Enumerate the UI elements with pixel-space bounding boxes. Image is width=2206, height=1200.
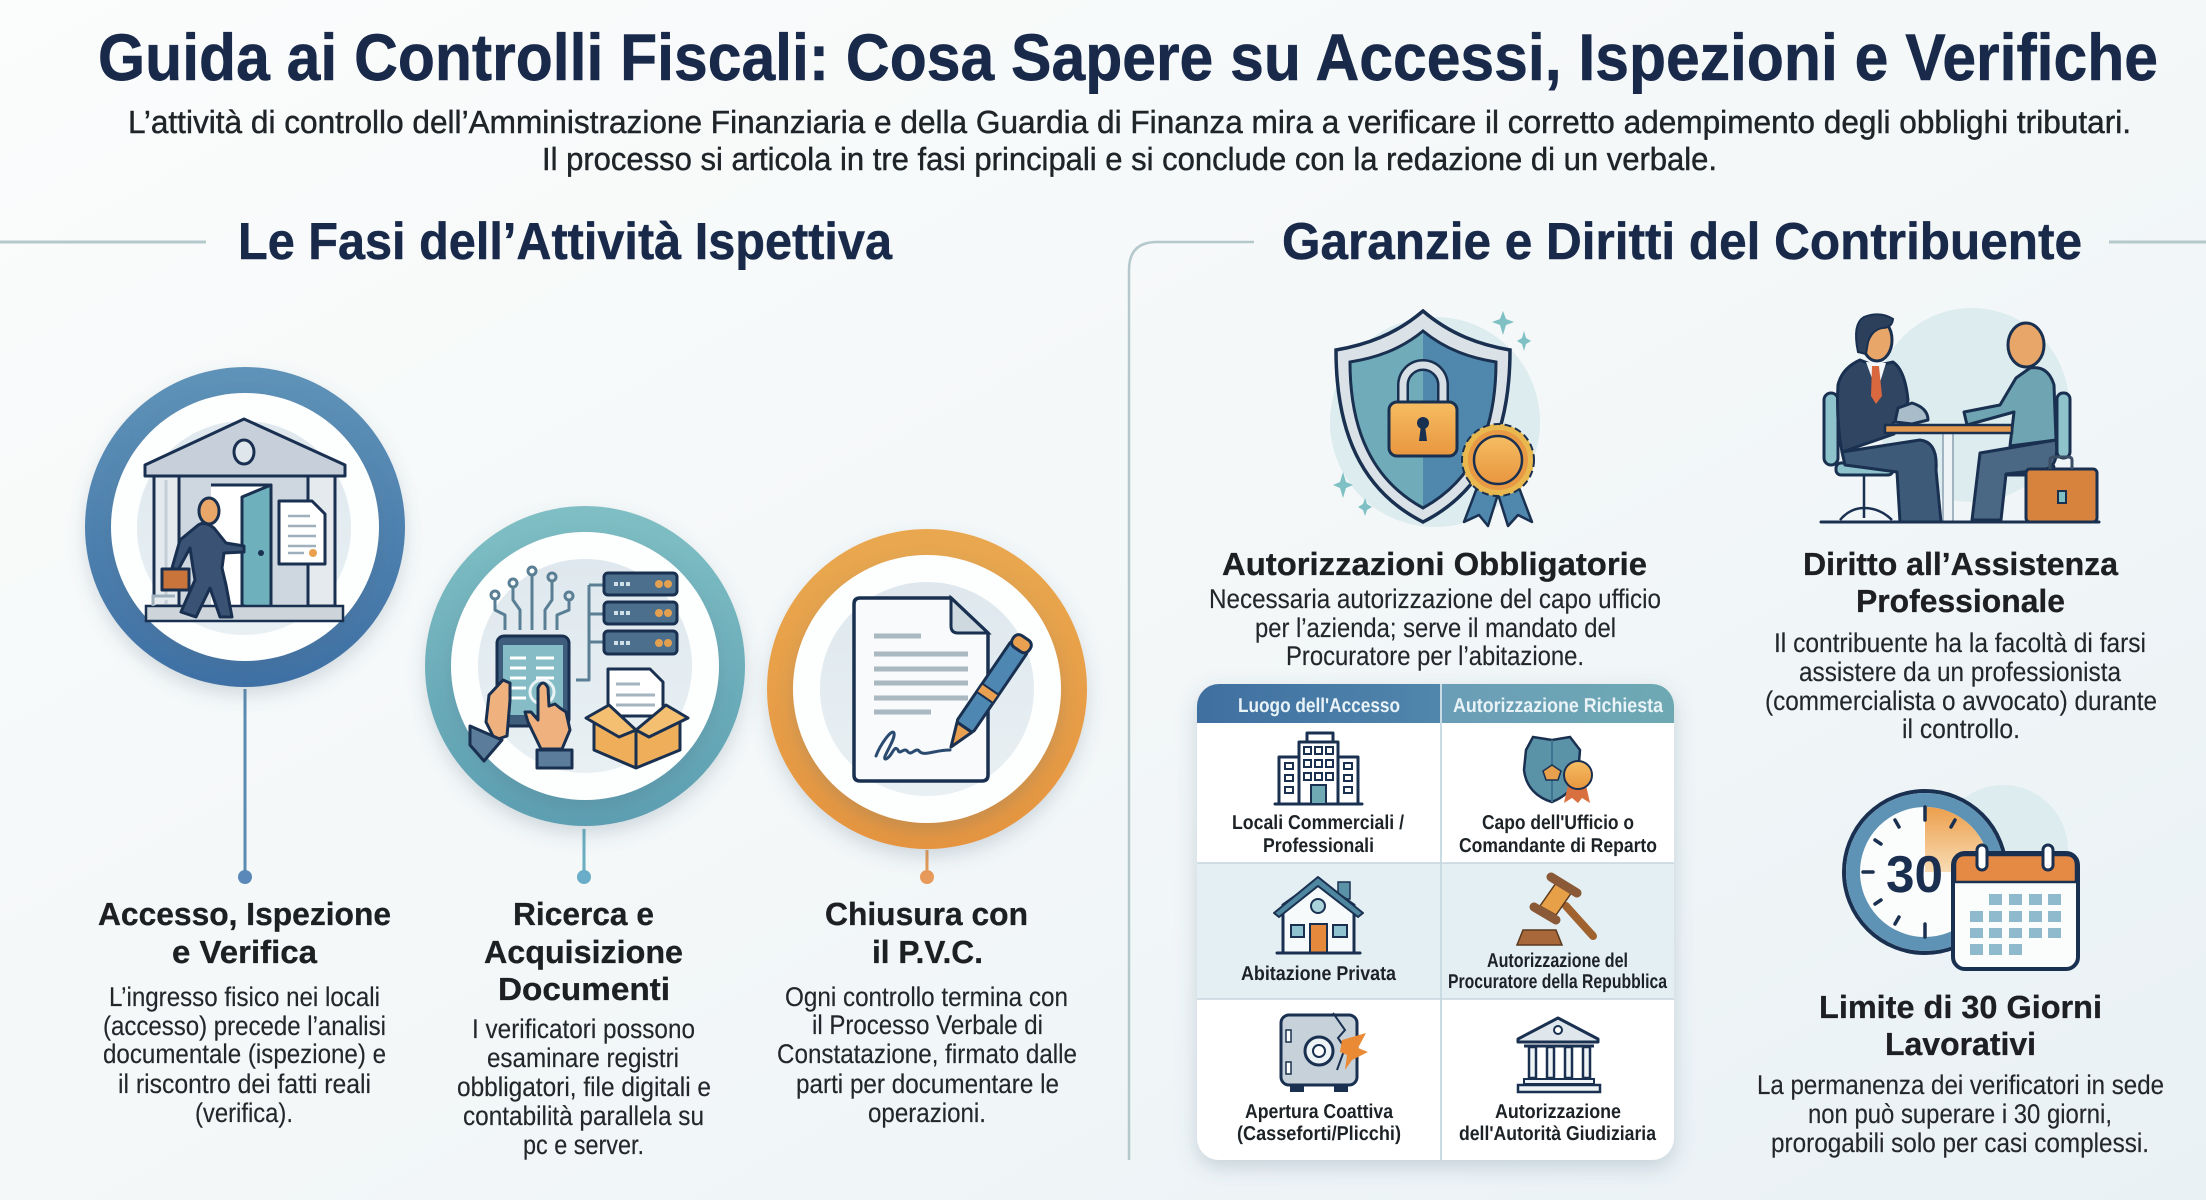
step 1 heading: e Verifica — [172, 934, 317, 970]
step 1 heading — [98, 896, 391, 970]
text: autorizzazioni: Procuratore per l’abitazione. — [1286, 641, 1584, 671]
heading: le fasi: Le Fasi dell’Attività Ispettiva — [238, 213, 893, 271]
step 2 text: I verificatori possono — [472, 1014, 695, 1044]
step 1 text — [103, 982, 386, 1128]
icon: courthouse — [1518, 1018, 1600, 1092]
step 3 heading: il P.V.C. — [872, 934, 983, 970]
step 3 text — [777, 982, 1077, 1128]
icon: consultation with professional — [1821, 308, 2099, 522]
step 2 text: obbligatori, file digitali e — [457, 1072, 711, 1102]
label: apertura coattiva — [1237, 1101, 1401, 1145]
text: assistenza: Il contribuente ha la facoltà di farsi — [1774, 628, 2146, 658]
label: apertura coattiva: (Casseforti/Plicchi) — [1237, 1123, 1401, 1145]
step 3 text: operazioni. — [868, 1098, 986, 1128]
heading: limite 30 giorni — [1819, 989, 2102, 1062]
step 3 heading: Chiusura con — [825, 896, 1028, 932]
step 2 text: pc e server. — [523, 1130, 644, 1160]
text: limite 30 giorni: La permanenza dei verificatori in sede — [1757, 1070, 2164, 1100]
table header: Autorizzazione Richiesta — [1453, 695, 1664, 717]
step 2 text — [457, 1014, 711, 1160]
step 1 text: L’ingresso fisico nei locali — [109, 982, 380, 1012]
step 3 text: Ogni controllo termina con — [785, 982, 1068, 1012]
connector line 1 — [238, 689, 252, 884]
connector line 3 — [920, 850, 934, 884]
text: limite 30 giorni — [1757, 1070, 2164, 1158]
icon: office building — [1275, 733, 1362, 804]
table header — [1238, 695, 1664, 717]
label: locali commerciali: Locali Commerciali / — [1232, 812, 1404, 834]
step 2 heading: Acquisizione — [484, 934, 683, 970]
text: limite 30 giorni: non può superare i 30 giorni, — [1808, 1099, 2112, 1129]
step 3 text: Constatazione, firmato dalle — [777, 1039, 1077, 1069]
icon: gavel — [1517, 877, 1593, 945]
number 30: 30 — [1886, 846, 1943, 904]
text: autorizzazioni: per l’azienda; serve il mandato del — [1255, 613, 1616, 643]
icon: badge with medal — [1524, 737, 1592, 803]
icon: house — [1274, 877, 1363, 953]
text: autorizzazioni: Necessaria autorizzazione del capo ufficio — [1209, 584, 1661, 614]
label: abitazione privata: Abitazione Privata — [1241, 963, 1397, 985]
connector line 2 — [577, 829, 591, 884]
heading: limite 30 giorni: Limite di 30 Giorni — [1819, 989, 2102, 1025]
label: capo ufficio — [1459, 812, 1657, 857]
step 1 text: il riscontro dei fatti reali — [118, 1069, 371, 1099]
label: procuratore: Autorizzazione del — [1487, 950, 1628, 972]
text: assistenza: assistere da un professionista — [1799, 657, 2122, 687]
step 2 text: esaminare registri — [487, 1043, 679, 1073]
heading: limite 30 giorni: Lavorativi — [1885, 1026, 2036, 1062]
text: autorizzazioni — [1209, 584, 1661, 671]
step 2 text: contabilità parallela su — [463, 1101, 704, 1131]
step 3 text: il Processo Verbale di — [812, 1010, 1043, 1040]
step 3 text: parti per documentare le — [796, 1069, 1059, 1099]
step 3 circle icon: signed document — [767, 529, 1087, 849]
label: locali commerciali: Professionali — [1263, 835, 1374, 857]
label: autorita giudiziaria: dell'Autorità Giudiziaria — [1459, 1123, 1657, 1145]
step 2 circle icon: digital documents — [425, 506, 745, 826]
icon: clock and calendar — [1844, 785, 2078, 969]
icon: forced safe — [1281, 1013, 1368, 1092]
text: limite 30 giorni: prorogabili solo per casi complessi. — [1771, 1128, 2149, 1158]
heading: assistenza: Diritto all’Assistenza — [1803, 546, 2118, 582]
step 3 heading — [825, 896, 1028, 970]
heading: garanzie: Garanzie e Diritti del Contribuente — [1282, 213, 2082, 271]
step 1 text: (verifica). — [195, 1098, 293, 1128]
panel: le fasi — [0, 213, 1087, 1160]
intro text: L’attività di controllo dell’Amministrazione Finanziaria e della Guardia di Finanza mira a verificare il corretto adempimento degli obblighi tributari. — [128, 104, 2131, 140]
icon: shield with padlock and medal — [1330, 311, 1540, 527]
step 1 text: (accesso) precede l’analisi — [103, 1011, 386, 1041]
label: apertura coattiva: Apertura Coattiva — [1245, 1101, 1394, 1123]
step 2 heading: Documenti — [498, 971, 670, 1007]
heading: assistenza: Professionale — [1856, 583, 2065, 619]
label: autorita giudiziaria — [1459, 1101, 1657, 1145]
step 2 heading — [484, 896, 683, 1007]
table header: Luogo dell'Accesso — [1238, 695, 1400, 717]
step 1 text: documentale (ispezione) e — [103, 1039, 386, 1069]
label: capo ufficio: Comandante di Reparto — [1459, 835, 1657, 857]
heading: assistenza — [1803, 546, 2118, 619]
text: assistenza: (commercialista o avvocato) durante — [1765, 686, 2157, 716]
text: assistenza — [1765, 628, 2157, 744]
label: procuratore: Procuratore della Repubblica — [1448, 971, 1668, 993]
heading: autorizzazioni: Autorizzazioni Obbligatorie — [1222, 546, 1647, 582]
intro text — [128, 104, 2131, 177]
intro text: Il processo si articola in tre fasi principali e si conclude con la redazione di un verbale. — [542, 141, 1717, 177]
step 1 heading: Accesso, Ispezione — [98, 896, 391, 932]
label: autorita giudiziaria: Autorizzazione — [1495, 1101, 1621, 1123]
panel: garanzie e diritti — [1129, 213, 2206, 1160]
text: assistenza: il controllo. — [1902, 714, 2020, 744]
label: procuratore — [1448, 950, 1668, 993]
label: capo ufficio: Capo dell'Ufficio o — [1482, 812, 1634, 834]
table: luogo e autorizzazione — [1197, 684, 1674, 1160]
step 2 heading: Ricerca e — [513, 896, 654, 932]
step 1 circle icon: building entry — [85, 367, 405, 687]
label: locali commerciali — [1232, 812, 1404, 857]
